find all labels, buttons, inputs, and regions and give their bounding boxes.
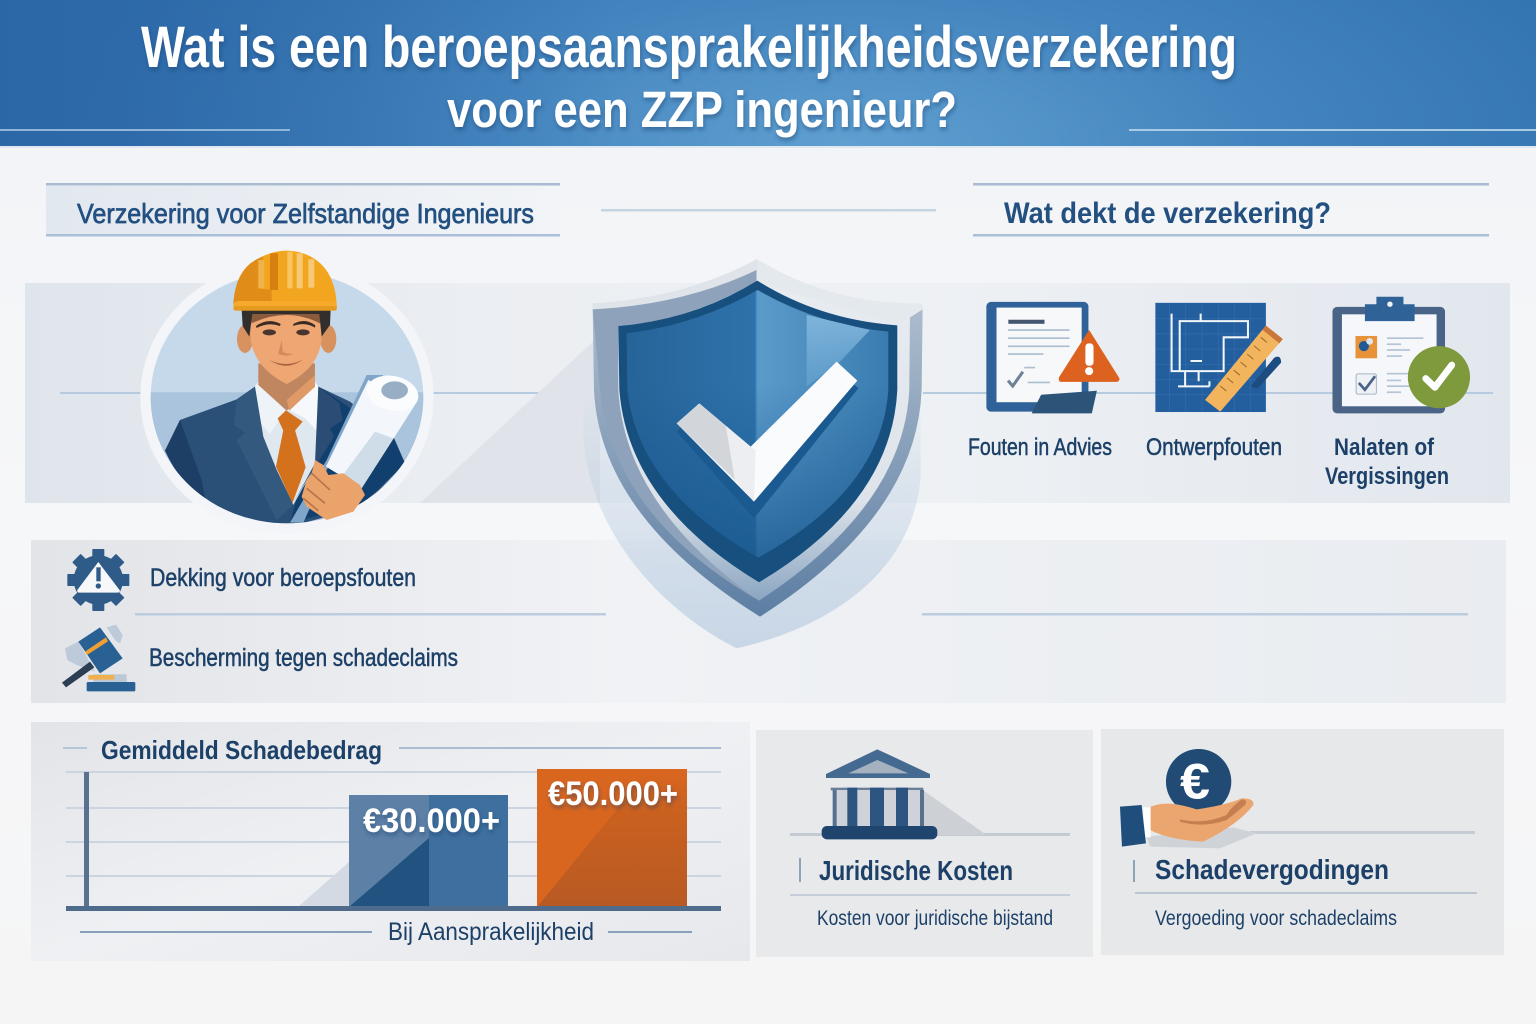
title: Wat is een beroepsaansprakelijkheidsverzekering	[141, 15, 1237, 80]
label: Ontwerpfouten	[1146, 434, 1282, 461]
hand	[302, 460, 365, 520]
text: Dekking voor beroepsfouten	[150, 564, 416, 592]
section heading: left: Verzekering voor Zelfstandige Ingenieurs	[77, 198, 534, 229]
shield cast shadow	[583, 390, 921, 648]
suit	[165, 387, 405, 527]
icon: gear with warning	[67, 549, 129, 611]
coverage: omissions	[1325, 297, 1470, 490]
bar: 50.000	[537, 769, 687, 907]
benefit: professional errors	[67, 549, 416, 611]
description: Vergoeding voor schadeclaims	[1155, 907, 1397, 930]
section heading: right: Wat dekt de verzekering?	[1004, 197, 1331, 230]
title	[141, 15, 1237, 138]
bar: 30.000	[349, 795, 508, 907]
label: Nalaten of	[1334, 434, 1435, 461]
benefit: damage claims	[62, 625, 458, 691]
section heading: left	[46, 183, 560, 236]
heading: Juridische Kosten	[819, 855, 1013, 886]
bar: 30.000: €30.000+	[363, 802, 500, 840]
title: voor een ZZP ingenieur?	[447, 81, 957, 138]
blueprint roll	[290, 375, 383, 523]
panel: average damage chart	[31, 722, 750, 961]
bar: 50.000: €50.000+	[548, 775, 678, 813]
icon: gavel	[62, 625, 135, 691]
bar chart	[66, 769, 721, 911]
ears and face	[237, 325, 253, 353]
coverage: advice errors	[968, 302, 1120, 461]
chart heading: Gemiddeld Schadebedrag	[101, 735, 382, 765]
panel: damages	[1101, 729, 1504, 955]
panel: upper band	[25, 283, 1510, 503]
label: Fouten in Advies	[968, 434, 1112, 461]
icon: document with warning	[986, 302, 1120, 413]
header banner	[0, 0, 1536, 148]
coverage: omissions: Vergissingen	[1325, 463, 1449, 490]
illustration: shield with checkmark	[583, 259, 923, 648]
panel: benefits band	[31, 540, 1506, 703]
panel: legal costs	[756, 730, 1093, 957]
coverage: design errors	[1146, 303, 1283, 461]
axis caption: Bij Aansprakelijkheid	[388, 918, 594, 946]
icon: courthouse	[822, 749, 987, 839]
text: Bescherming tegen schadeclaims	[149, 644, 458, 672]
description: Kosten voor juridische bijstand	[817, 907, 1053, 930]
icon: clipboard with green check	[1332, 297, 1470, 413]
illustration: engineer portrait	[140, 251, 434, 534]
heading: Schadevergodingen	[1155, 854, 1389, 885]
icon: hand holding euro coin: €	[1180, 754, 1210, 810]
hard hat	[233, 251, 337, 303]
icon: hand holding euro coin	[1120, 749, 1257, 848]
icon: blueprint with ruler	[1155, 303, 1283, 412]
